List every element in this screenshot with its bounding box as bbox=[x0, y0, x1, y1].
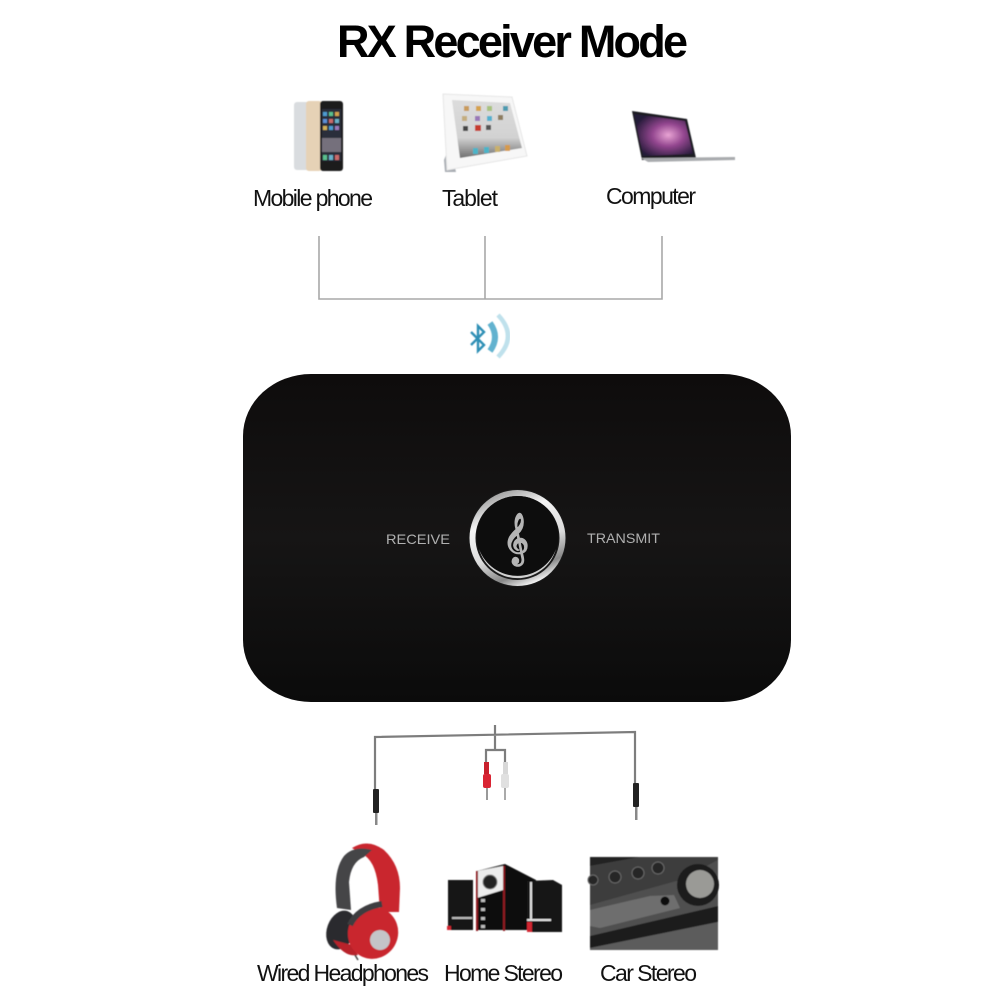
button ring bbox=[468, 489, 566, 587]
connector lines: source devices bbox=[319, 236, 662, 299]
label: tablet: Tablet bbox=[442, 185, 499, 211]
label: computer: Computer bbox=[606, 183, 696, 209]
label: mobile phone: Mobile phone bbox=[253, 185, 373, 211]
icon: laptop bbox=[632, 111, 735, 162]
label: wired headphones: Wired Headphones bbox=[257, 960, 429, 986]
left 3.5mm plug bbox=[373, 789, 379, 825]
icon: home stereo speakers bbox=[447, 864, 562, 932]
title: RX Receiver Mode bbox=[337, 16, 688, 67]
RCA white plug bbox=[501, 762, 509, 800]
label: transmit: TRANSMIT bbox=[587, 530, 660, 546]
label: receive: RECEIVE bbox=[386, 531, 450, 547]
right 3.5mm plug bbox=[633, 783, 639, 820]
label: home stereo: Home Stereo bbox=[444, 960, 563, 986]
RCA red plug bbox=[483, 762, 491, 800]
icon: tablet bbox=[443, 94, 527, 172]
icon: car stereo panel bbox=[588, 857, 719, 950]
panel: receiver device bbox=[243, 374, 791, 702]
icon: bluetooth signal bbox=[471, 315, 508, 357]
label: car stereo: Car Stereo bbox=[600, 960, 697, 986]
cable: audio outputs bbox=[373, 725, 639, 825]
icon: mobile phones bbox=[294, 101, 343, 171]
icon: treble clef: 𝄞 bbox=[503, 513, 529, 566]
icon: red headphones bbox=[321, 843, 407, 967]
